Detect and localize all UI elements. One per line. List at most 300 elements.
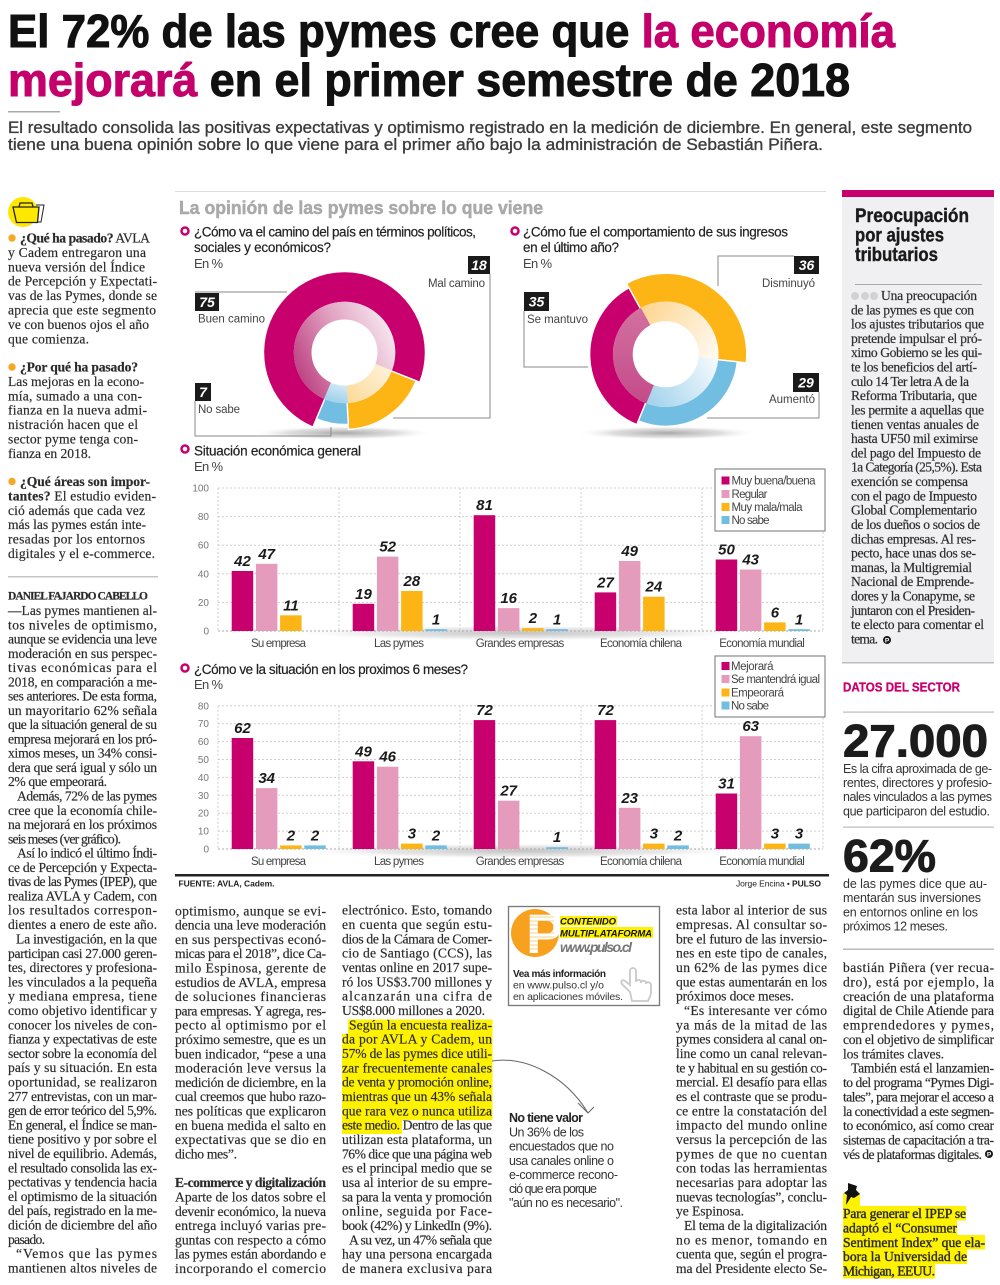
article column 5: to del programa “Pymes Digi-	[843, 1075, 994, 1090]
article column 1: los resultados correspon-	[8, 903, 157, 918]
article column 1: mantienen altos niveles de	[8, 1260, 157, 1275]
bar chart: situación económica general: 11	[283, 597, 299, 614]
article column 3 with highlight: ventas online en 2017 supe-	[342, 960, 492, 975]
article column 5: sistemas de capacitación a tra-	[843, 1133, 994, 1148]
bar chart: situación económica general: 1	[432, 612, 440, 628]
donut chart: ingresos: En %	[523, 256, 552, 271]
subtitle: El resultado consolida las positivas expectativas y optimismo registrado en la medición de diciembre. En general, este segmento	[8, 119, 972, 137]
left sidebar: key questions: que comienza.	[8, 332, 89, 346]
article column 3 with highlight: book (42%) y LinkedIn (9%).	[342, 1218, 492, 1234]
article column 1: La investigación, en la que	[16, 932, 157, 946]
bar chart: próximos 6 meses: 31	[718, 776, 735, 792]
legend: situación económica: Muy buena/buena	[732, 476, 816, 488]
article column 4: nes en este tipo de canales,	[676, 946, 827, 961]
note: IPEP with pin: adaptó el “Consumer	[843, 1220, 957, 1236]
article column 2: Aparte de los datos sobre el	[175, 1190, 326, 1204]
article column 1: ses anteriores. De esta forma,	[8, 689, 157, 704]
stat: 62%: mentarán sus inversiones	[843, 891, 981, 905]
article column 3 with highlight: que rara vez o nunca utiliza	[342, 1103, 492, 1118]
promo box: contenido multiplataforma: www.pulso.cl	[560, 939, 633, 955]
article column 4: necesarias para adoptar las	[676, 1175, 827, 1190]
left sidebar: key questions: digitales y el e-commerce.	[8, 546, 155, 561]
panel body text: dores y la Conapyme, se	[851, 588, 975, 604]
left sidebar: key questions: ¿Qué ha pasado? AVLA	[20, 230, 150, 246]
article column 1: DANIEL FAJARDO CABELLO	[8, 590, 148, 602]
article column 3 with highlight: A su vez, un 47% señala que	[349, 1232, 492, 1247]
article column 4: que estas aumentarán en los	[676, 974, 827, 989]
article column 5: vés de plataformas digitales.	[843, 1147, 982, 1162]
donut chart: camino del país: Buen camino	[198, 314, 265, 326]
article column 2: micas para el 2018”, dice Ca-	[175, 946, 326, 961]
left sidebar: key questions: nistración hacen que el	[8, 417, 138, 432]
article column 1: el optimismo de la situación	[8, 1189, 157, 1204]
article column 1: nivel de equilibrio. Además,	[8, 1146, 157, 1161]
article column 1: 277 entrevistas, con un mar-	[8, 1089, 157, 1104]
bar chart: situación económica general	[182, 444, 825, 650]
left sidebar: key questions: y Cadem entregaron una	[8, 245, 146, 260]
stat: 27.000: nales vinculados a las pymes	[843, 790, 992, 804]
left sidebar: key questions: ¿Por qué ha pasado?	[20, 360, 138, 374]
left sidebar: key questions: fianza en la nueva admi-	[8, 403, 147, 418]
legend: situación económica: Muy mala/mala	[732, 502, 803, 514]
article column 3 with highlight: de manera exclusiva para	[342, 1261, 492, 1276]
chart source line	[175, 874, 829, 889]
article column 5: los trámites claves.	[843, 1046, 944, 1061]
article column 4: esta labor al interior de sus	[676, 903, 827, 918]
article column 5: También está el lanzamien-	[851, 1061, 994, 1076]
bar chart: situación económica general: En %	[194, 459, 223, 474]
bar chart: próximos 6 meses: 80	[198, 701, 209, 712]
article column 4: El tema de la digitalización	[684, 1218, 827, 1233]
article column 3 with highlight: US$8.000 millones a 2020.	[342, 1003, 485, 1018]
article column 1: el resultado consolida las ex-	[8, 1160, 157, 1175]
panel heading: tributarios	[855, 245, 938, 266]
panel body text: pecto, hace unas dos se-	[851, 546, 976, 561]
article column 2: dencia una leve moderación	[175, 918, 326, 933]
bar chart: situación económica general: Grandes empresas	[476, 638, 564, 650]
article column 1: ce de Percepción y Expecta-	[8, 860, 157, 875]
article column 2: pecto al optimismo por el	[175, 1018, 326, 1033]
article column 5: con el objetivo de simplificar	[843, 1032, 994, 1047]
panel body text: les permite a aquellas que	[851, 402, 984, 418]
bar chart: próximos 6 meses: 34	[258, 770, 276, 787]
article column 1: tivas de las Pymes (IPEP), que	[8, 874, 157, 890]
article column 2: guntas con respecto a cómo	[175, 1232, 326, 1247]
title	[8, 5, 895, 106]
donut chart: camino del país: No sabe	[198, 404, 240, 416]
left sidebar: key questions	[8, 230, 157, 561]
article column 2: optimismo, aunque se evi-	[175, 903, 326, 918]
article column 1: dientes a enero de este año.	[8, 917, 157, 932]
panel body text: Global Complementario	[851, 503, 977, 518]
bar chart: próximos 6 meses: 2	[673, 827, 683, 844]
panel body text: exención se compensa	[851, 474, 968, 489]
note: IPEP with pin: Michigan, EEUU.	[843, 1264, 935, 1278]
bar chart: situación económica general: 40	[198, 569, 209, 580]
callout: no tiene valor	[509, 1111, 623, 1210]
panel body text: del pago del Impuesto de	[851, 445, 981, 460]
legend: próximos 6 meses	[715, 656, 825, 717]
article column 4: un 62% de las pymes dice	[676, 960, 827, 975]
article column 1: un mayoritario 62% señala	[8, 703, 157, 718]
article column 1: realiza AVLA y Cadem, con	[8, 888, 157, 903]
donut chart: ingresos	[512, 225, 819, 440]
bar chart: próximos 6 meses: 63	[742, 718, 760, 735]
article column 4: pymes de que no cuentan	[676, 1146, 827, 1161]
bar chart: próximos 6 meses: 3	[408, 826, 417, 843]
chart panel heading: La opinión de las pymes sobre lo que viene	[179, 197, 543, 218]
article column 1: país y su situación. En esta	[8, 1060, 157, 1075]
bar chart: próximos 6 meses: 72	[476, 702, 493, 719]
article column 1: tiene positivo y por sobre el	[8, 1132, 157, 1147]
bar chart: situación económica general: Economía mundial	[719, 638, 805, 650]
bar chart: situación económica general: 16	[500, 590, 518, 607]
article column 5: bastián Piñera (ver recua-	[843, 960, 994, 976]
article column 3 with highlight: cio de Santiago (CCS), las	[342, 946, 492, 962]
article column 3 with highlight: da por AVLA y Cadem, un	[342, 1032, 492, 1047]
article column 2: devenir económico, la nueva	[175, 1204, 326, 1219]
promo box: contenido multiplataforma: CONTENIDO	[560, 916, 617, 928]
article column 1: 2018, en comparación a me-	[8, 674, 157, 689]
article column 2	[175, 903, 326, 1276]
article column 5: P	[987, 1152, 992, 1158]
callout: no tiene valor: Un 36% de los	[509, 1126, 584, 1140]
bar chart: próximos 6 meses: 3	[771, 826, 780, 843]
article column 1: como objetivo identificar y	[8, 1003, 157, 1018]
article column 1: pasado.	[8, 1232, 45, 1247]
bar chart: próximos 6 meses: 27	[499, 783, 518, 800]
donut chart: camino del país: En %	[194, 256, 223, 271]
bar chart: situación económica general: 24	[645, 579, 663, 596]
panel body text: tema.	[851, 631, 878, 646]
bar chart: situación económica general: 19	[355, 586, 372, 603]
article column 1: moderación en sus perspec-	[8, 646, 157, 661]
bar chart: situación económica general: 47	[257, 546, 276, 563]
article column 4: es el contraste que se produ-	[676, 1089, 827, 1104]
article column 3 with highlight: 76% dice que una página web	[342, 1146, 492, 1161]
article column 3 with highlight: mientras que un 43% señala	[342, 1089, 492, 1104]
article column 3 with highlight: electrónico. Esto, tomando	[342, 903, 492, 918]
panel body text: culo 14 Ter letra A de la	[851, 374, 969, 389]
stat: 62%: próximos 12 meses.	[843, 920, 948, 934]
article column 1: seis meses (ver gráfico).	[8, 831, 121, 847]
article column 1: tos niveles de optimismo,	[8, 617, 157, 632]
note: IPEP with pin: bora la Universidad de	[843, 1249, 967, 1264]
stat: 62%: 62%	[843, 831, 936, 882]
left sidebar: key questions: ció además que cada vez	[8, 503, 145, 518]
promo box: contenido multiplataforma: Vea más información	[513, 969, 606, 980]
stat: 62%: en entornos online en los	[843, 906, 978, 920]
stat: 62%: de las pymes dice que au-	[843, 877, 987, 891]
article column 3 with highlight: alcanzarán una cifra de	[342, 989, 492, 1004]
article column 1: —Las pymes mantienen al-	[7, 603, 157, 618]
article column 4: mercial. El desafío para ellas	[676, 1075, 827, 1090]
bar chart: próximos 6 meses: 40	[198, 773, 209, 784]
left sidebar: key questions: más las pymes están inte-	[8, 517, 146, 532]
article column 1: sector sobre la economía del	[8, 1046, 157, 1061]
panel: preocupación por ajustes tributarios	[842, 190, 994, 664]
article column 1: conocer los niveles de con-	[8, 1017, 157, 1032]
note: IPEP with pin: Sentiment Index” que ela-	[843, 1235, 985, 1250]
bar chart: próximos 6 meses: 10	[198, 827, 209, 838]
donut chart: ingresos: 36	[799, 257, 814, 273]
stat: 27.000	[843, 716, 994, 828]
legend: próximos 6 meses: Mejorará	[731, 661, 774, 673]
bar chart: próximos 6 meses: Grandes empresas	[476, 856, 564, 868]
article column 1: En general, el Índice se man-	[8, 1116, 157, 1132]
chart source line: Jorge Encina • PULSO	[736, 879, 821, 889]
callout: no tiene valor: ció que era porque	[509, 1182, 597, 1196]
bar chart: próximos 6 meses: 1	[553, 829, 561, 846]
bar chart: próximos 6 meses: Economía chilena	[600, 856, 683, 868]
promo box: contenido multiplataforma: MULTIPLATAFORMA	[560, 928, 652, 940]
stat: 27.000: rentes, directores y profesio-	[843, 776, 992, 790]
bar chart: próximos 6 meses	[182, 656, 825, 868]
datos del sector: heading: DATOS DEL SECTOR	[843, 681, 960, 695]
bar chart: situación económica general: 27	[596, 574, 614, 591]
panel heading: Preocupación	[855, 206, 969, 227]
bar chart: próximos 6 meses: 0	[203, 844, 209, 856]
subtitle: tiene una buena opinión sobre lo que viene para el primer año bajo la administración de Sebastián Piñera.	[8, 136, 823, 154]
bar chart: situación económica general: Economía chilena	[600, 638, 683, 650]
article column 1: aunque se evidencia una leve	[8, 632, 157, 646]
article column 1: empresa mejorará en los pró-	[8, 731, 157, 746]
article column 3 with highlight: zar frecuentemente canales	[342, 1060, 492, 1075]
article column 3 with highlight: es el principal medio que se	[342, 1161, 492, 1176]
legend: próximos 6 meses: No sabe	[731, 701, 769, 713]
article column 4: bre el futuro de las inversio-	[676, 931, 827, 946]
article column 2: milo Espinosa, gerente de	[175, 960, 326, 976]
donut chart: camino del país: 7	[199, 384, 208, 400]
bar chart: próximos 6 meses: Su empresa	[251, 856, 307, 868]
bar chart: próximos 6 meses: 60	[198, 737, 209, 748]
left sidebar: key questions: aprecia que este segmento	[8, 302, 156, 318]
article column 2: las pymes están abordando e	[175, 1247, 326, 1262]
article column 2: próximo semestre, que es un	[175, 1032, 326, 1047]
article column 2: en buena medida el salto en	[175, 1118, 326, 1133]
panel body text: ximo Gobierno se les qui-	[851, 345, 982, 360]
donut chart: ingresos: Aumentó	[769, 394, 815, 406]
article column 5	[843, 960, 994, 1162]
article column 4: no es menor, tomando en	[676, 1232, 827, 1247]
article column 5: to económico, así como crear	[843, 1118, 994, 1133]
article column 3 with highlight: ró los US$3.700 millones y	[342, 974, 492, 989]
bar chart: situación económica general: 2	[528, 610, 538, 627]
article column 1: na mejorará en los próximos	[8, 817, 157, 832]
title: mejorará en el primer semestre de 2018	[8, 54, 850, 106]
bar chart: próximos 6 meses: En %	[194, 677, 223, 692]
icon: pin	[844, 1183, 860, 1205]
article column 5: emprendedores y pymes,	[843, 1018, 994, 1032]
bar chart: situación económica general: 49	[620, 543, 639, 560]
promo box: contenido multiplataforma: en aplicaciones móviles.	[513, 991, 623, 1003]
legend: situación económica: Regular	[732, 489, 768, 501]
article column 1: oportunidad, se realizaron	[8, 1074, 157, 1090]
left sidebar: key questions: nueva versión del Índice	[8, 258, 145, 274]
article column 3 with highlight: hay una persona encargada	[342, 1247, 492, 1262]
panel body text: con el pago de Impuesto	[851, 488, 977, 503]
article column 4: ma del Presidente electo Se-	[676, 1261, 827, 1276]
bar chart: situación económica general: 60	[198, 541, 209, 552]
article column 2: moderación leve versus la	[175, 1061, 326, 1076]
article column 1: fianza y expectativas de este	[8, 1032, 157, 1047]
article column 2: E-commerce y digitalización	[175, 1175, 326, 1190]
stat: 62%	[843, 831, 994, 950]
article column 4: impacto del mundo online	[676, 1118, 827, 1133]
stat: 27.000: 27.000	[843, 716, 988, 767]
left sidebar: key questions: vas de las Pymes, donde se	[8, 288, 157, 303]
article column 4	[676, 903, 827, 1276]
article column 4: cuenta que, según el progra-	[676, 1247, 827, 1262]
article column 1: pectativas y tendencia hacia	[8, 1175, 157, 1190]
article column 3 with highlight: utilizan esta plataforma, un	[342, 1132, 492, 1147]
article column 1: participan casi 27.000 geren-	[8, 946, 157, 961]
panel body text: Reforma Tributaria, que	[851, 388, 977, 403]
panel body text: P	[885, 638, 890, 644]
bar chart: situación económica general: Su empresa	[251, 638, 307, 650]
callout: no tiene valor: e-commerce recono-	[509, 1168, 618, 1182]
left sidebar: key questions: Las mejoras en la econo-	[8, 374, 144, 389]
panel body text: 1a Categoría (25,5%). Esta	[851, 460, 982, 476]
panel body text: juntaron con el Presiden-	[850, 603, 975, 618]
callout: no tiene valor: encuestados que no	[509, 1140, 614, 1154]
legend: próximos 6 meses: Se mantendrá igual	[731, 674, 820, 686]
left sidebar: key questions: resadas por los entornos	[8, 532, 145, 547]
panel body text: Una preocupación	[881, 288, 977, 303]
panel body text: de las pymes es que con	[851, 302, 974, 317]
legend: situación económica: No sabe	[732, 515, 770, 527]
panel body text	[850, 288, 984, 646]
bar chart: situación económica general: 0	[203, 626, 209, 638]
article column 1: les vinculados a la pequeña	[8, 974, 157, 989]
article column 2: de soluciones financieras	[175, 989, 326, 1004]
arrow to callout	[492, 1060, 594, 1113]
panel body text: manas, la Multigremial	[851, 560, 972, 575]
callout: no tiene valor: "aún no es necesario".	[509, 1196, 623, 1210]
article column 1: ximos meses, un 34% consi-	[8, 746, 157, 761]
bar chart: próximos 6 meses: 3	[795, 826, 804, 843]
donut chart: camino del país: 18	[471, 257, 487, 273]
stat: 27.000: que participaron del estudio.	[843, 804, 990, 818]
article column 1: que la situación general de su	[8, 717, 157, 732]
bar chart: situación económica general: 50	[718, 542, 735, 558]
article column 3 with highlight: dios de la Cámara de Comer-	[342, 931, 492, 946]
article column 2: para empresas. Y agrega, res-	[175, 1003, 326, 1018]
panel body text: dichas empresas. Al res-	[851, 531, 976, 546]
article column 1: del país, registrado en la me-	[8, 1203, 157, 1218]
donut chart: ingresos: ¿Cómo fue el comportamiento de sus ingresos	[523, 225, 788, 240]
article column 2: incorporando el comercio	[175, 1261, 326, 1276]
panel body text: tienen ventas anuales de	[851, 417, 979, 432]
article column 3 with highlight: de venta y promoción online,	[342, 1075, 492, 1090]
panel body text: pretende impulsar el pró-	[851, 331, 982, 346]
bar chart: próximos 6 meses: 23	[620, 790, 639, 807]
panel heading: por ajustes	[855, 226, 944, 246]
article column 4: te y habitual en su gestión co-	[676, 1060, 827, 1075]
bar chart: situación económica general: 42	[233, 553, 251, 570]
article column 3 with highlight: sa para la venta y promoción	[342, 1189, 492, 1204]
donut chart: camino del país: sociales y económicos?	[194, 240, 331, 255]
callout: no tiene valor: usa canales online o	[509, 1154, 614, 1168]
donut chart: camino del país: Mal camino	[428, 278, 485, 290]
article column 4: próximos doce meses.	[676, 989, 794, 1004]
article column 3 with highlight: usa al interior de su empre-	[342, 1175, 492, 1190]
left sidebar: key questions: ¿Qué áreas son impor-	[20, 474, 150, 489]
bar chart: próximos 6 meses: Las pymes	[374, 856, 424, 868]
article column 4: pymes considera al canal on-	[676, 1032, 827, 1047]
article column 2: entrega incluyó varias pre-	[175, 1218, 326, 1233]
bar chart: situación económica general: 80	[198, 512, 209, 523]
bar chart: situación económica general: 28	[403, 573, 421, 590]
left sidebar: key questions: ve con buenos ojos el año	[8, 317, 149, 332]
article column 1: Además, 72% de las pymes	[17, 788, 157, 804]
article column 4: empresas. Al consultar so-	[676, 917, 827, 932]
bar chart: situación económica general: Situación económica general	[194, 444, 361, 459]
article column 1: tes, directores y profesiona-	[8, 960, 157, 975]
article column 1: “Vemos que las pymes	[16, 1246, 157, 1261]
article column 1: Así lo indicó el último Índi-	[17, 845, 157, 861]
bar chart: situación económica general: 100	[192, 484, 209, 494]
article column 3 with highlight: en cuenta que según estu-	[342, 917, 492, 932]
left sidebar: key questions: tantes? El estudio eviden-	[8, 488, 156, 503]
legend: próximos 6 meses: Empeorará	[731, 688, 785, 700]
bar chart: situación económica general: 20	[198, 598, 209, 609]
stat: 27.000: Es la cifra aproximada de ge-	[843, 762, 992, 776]
bar chart: próximos 6 meses: 2	[286, 827, 296, 844]
bar chart: próximos 6 meses: 49	[354, 743, 372, 760]
article column 1: gen de error teórico del 5,9%.	[8, 1103, 157, 1118]
donut chart: camino del país: ¿Cómo va el camino del país en términos políticos,	[194, 225, 476, 240]
bar chart: próximos 6 meses: 70	[198, 719, 209, 730]
article column 4: line como un canal relevan-	[676, 1046, 827, 1061]
bar chart: próximos 6 meses: ¿Cómo ve la situación en los proximos 6 meses?	[194, 662, 468, 677]
article column 4: ya más de la mitad de las	[676, 1017, 827, 1032]
donut chart: ingresos: 35	[529, 294, 544, 310]
article column 1: dición de diciembre del año	[8, 1218, 157, 1232]
callout: no tiene valor: No tiene valor	[509, 1111, 583, 1125]
note: IPEP with pin	[843, 1183, 985, 1278]
article column 1	[7, 590, 157, 1275]
bar chart: situación económica general: 1	[795, 612, 803, 628]
article column 5: la conectividad a este segmen-	[843, 1104, 994, 1119]
bar chart: próximos 6 meses: 30	[198, 791, 209, 802]
panel body text: te los beneficios del artí-	[851, 360, 977, 375]
bar chart: próximos 6 meses: 20	[198, 809, 209, 820]
bar chart: próximos 6 meses: 62	[234, 720, 251, 737]
article column 2: estudios de AVLA, empresa	[175, 975, 326, 990]
bar chart: situación económica general: 81	[476, 497, 493, 514]
article column 5: digital de Chile Atiende para	[843, 1003, 994, 1018]
article column 4: “Es interesante ver cómo	[684, 1003, 827, 1018]
article column 5: dro), está por ejemplo, la	[843, 974, 994, 990]
title: El 72% de las pymes cree que la economía	[8, 5, 895, 57]
bar chart: próximos 6 meses: 2	[431, 827, 441, 844]
left sidebar: key questions: de Percepción y Expectati-	[8, 274, 157, 289]
donut chart: ingresos: en el último año?	[523, 240, 619, 255]
article column 2: nes políticas que explicaron	[175, 1104, 326, 1118]
legend: situación económica	[715, 469, 825, 531]
article column 2: buen indicador, “pese a una	[175, 1046, 326, 1061]
article column 1: 2% que empeorará.	[8, 774, 107, 789]
article column 4: ce entre la constatación del	[676, 1103, 827, 1118]
panel heading	[855, 206, 969, 266]
article column 3 with highlight	[342, 903, 492, 1276]
left sidebar: key questions: sector pyme tenga con-	[8, 432, 138, 446]
promo box: contenido multiplataforma: P	[526, 902, 563, 965]
article column 1: dera que será igual y sólo un	[8, 760, 157, 775]
article column 3 with highlight: 57% de las pymes dice utili-	[342, 1046, 492, 1061]
article column 4: nuevas tecnologías”, conclu-	[676, 1189, 827, 1204]
